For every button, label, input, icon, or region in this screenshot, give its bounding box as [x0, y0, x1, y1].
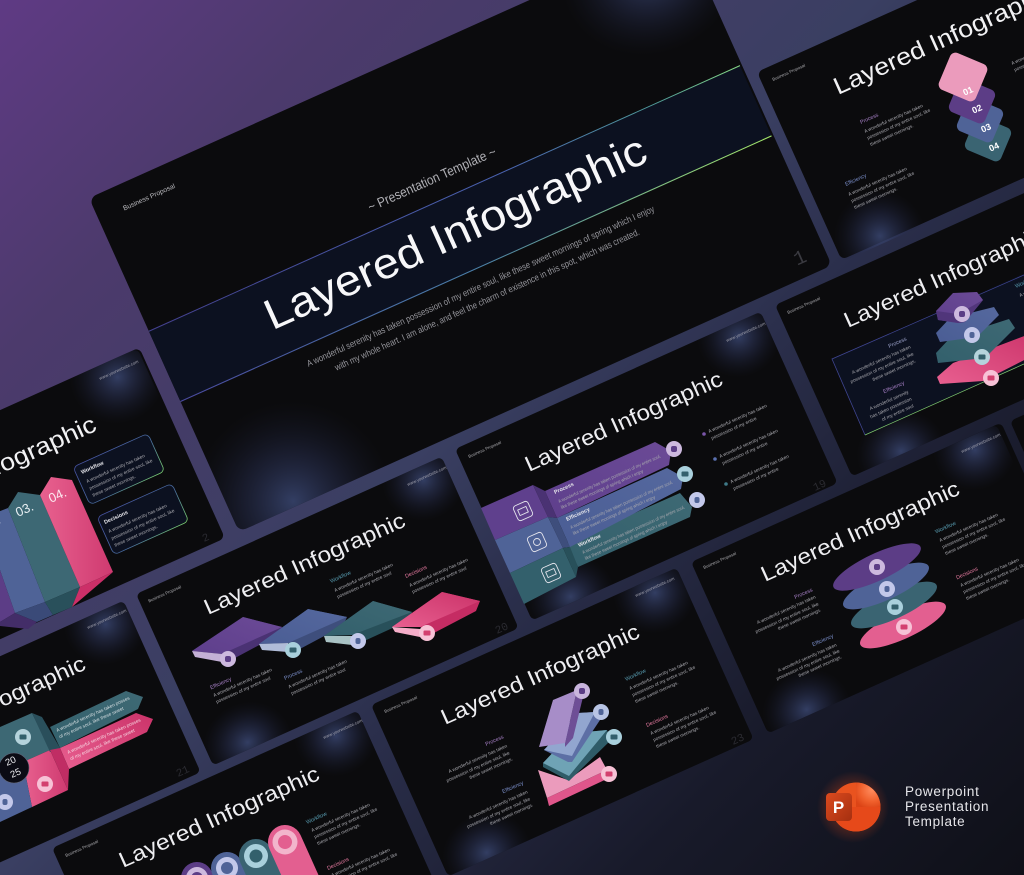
text: workflow: Workflow [624, 668, 647, 683]
text: decisions: possession of my entire soul, like [652, 710, 717, 742]
panel: slide 23 fanned layers [372, 569, 752, 875]
text: process: Process [553, 482, 575, 496]
text: business proposal: Business Proposal [786, 296, 821, 315]
text: process: Process [859, 112, 880, 126]
page number: 19 [812, 478, 829, 495]
text: efficiency: these sweet mornings. [798, 654, 842, 678]
page number: 2 [201, 532, 212, 546]
callout: workflow [73, 433, 165, 505]
text: decisions: A wonderful serenity has taken [408, 557, 469, 588]
column chart 01-04 [0, 477, 113, 629]
text: workflow: Workflow [305, 811, 328, 826]
fanned layers [538, 683, 622, 806]
text: business proposal: Business Proposal [122, 183, 177, 212]
callout: decisions: possession of my entire soul, like [110, 508, 176, 541]
text: process [755, 587, 822, 634]
text: workflow: Workflow [329, 570, 352, 585]
text: efficiency: Efficiency [811, 633, 835, 648]
text: workflow: Workflow [934, 521, 957, 535]
bullet list: A wonderful serenity has taken [707, 403, 768, 434]
text: efficiency: A wonderful serenity has taken possession of my entire soul, [569, 479, 674, 530]
text: process: A wonderful serenity has taken [756, 594, 817, 625]
ribbon diagram: 20 [4, 754, 18, 769]
text: decisions: possession of my entire soul [411, 565, 467, 594]
text: efficiency: A wonderful serenity has taken [777, 642, 838, 673]
column chart 01-04: 03. [13, 499, 36, 520]
text: powerpoint presentation template: Powerpoint [905, 784, 980, 799]
title band [149, 65, 772, 402]
text: efficiency: Efficiency [844, 173, 868, 188]
text: workflow [1014, 275, 1024, 298]
text: efficiency: possession of my entire soul, like [466, 796, 531, 829]
icon: powerpoint logo: P [833, 798, 844, 817]
text: efficiency [466, 780, 534, 829]
text: business proposal: Business Proposal [771, 63, 806, 82]
text: decisions: A wonderful serenity has taken [959, 557, 1020, 588]
pill chart [176, 820, 326, 875]
bullet list [702, 403, 793, 491]
text: workflow: A wonderful serenity has taken possession of my entire soul, [581, 504, 686, 555]
text: workflow: A wonderful serenity has taken [628, 660, 689, 691]
text: efficiency: like these sweet mornings of spring which I enjoy [572, 494, 657, 536]
callout: workflow: possession of my entire soul, like [88, 458, 154, 491]
text: process: possession of my entire soul [290, 667, 346, 696]
heading: Layered Infographic [840, 222, 1024, 333]
text: process [446, 734, 513, 783]
text: efficiency: A wonderful serenity has taken [847, 166, 908, 197]
panel: slide 19 arrows [456, 313, 836, 619]
text: workflow: A wonderful serenity has taken [310, 802, 371, 833]
text: efficiency [844, 164, 918, 210]
text: workflow: Workflow [577, 533, 603, 549]
text: efficiency: A wonderful serenity has taken [468, 789, 529, 820]
stacked squares 01-04: 04 [987, 140, 1001, 154]
text: workflow: these sweet mornings. [316, 822, 361, 846]
text: efficiency: Efficiency [882, 380, 906, 395]
text: workflow: possession of my entire soul [336, 570, 392, 599]
panel: slide stacked blocks [776, 193, 1024, 475]
text: process: A wonderful serenity has taken [448, 743, 508, 774]
callout: workflow: Workflow [80, 460, 106, 476]
text: workflow [624, 658, 699, 704]
text: efficiency [869, 380, 914, 422]
arrow diagram [481, 441, 705, 604]
text: process: possession of my entire soul, like [850, 351, 915, 384]
callout: decisions: Decisions [103, 510, 129, 526]
text: efficiency: Efficiency [209, 676, 233, 691]
text: efficiency: these sweet mornings. [853, 186, 898, 210]
text: workflow: like these sweet mornings of spring which I enjoy [584, 519, 669, 561]
text: efficiency: Efficiency [501, 780, 525, 795]
text: efficiency [776, 633, 842, 681]
panel: slide 01-04 squares [758, 0, 1024, 258]
description: with my whole heart. I am alone, and feel the charm of existence in this spot, which was created. [332, 227, 641, 373]
description: A wonderful serenity has taken possession of my entire soul, like these sweet mornings of spring which I enjoy [305, 204, 656, 369]
text: workflow: possession of my entire soul, like [631, 665, 696, 697]
ellipse stack [828, 534, 951, 657]
text: workflow [305, 800, 381, 846]
website: www.yourwebsite.com [725, 321, 767, 343]
column chart 01-04: 04. [46, 485, 69, 506]
subtitle: ~ Presentation Template ~ [365, 144, 499, 215]
text: process: possession of my entire soul, like [755, 601, 820, 634]
heading: Layered Infographic [437, 619, 643, 730]
page number: 23 [730, 732, 747, 749]
stacked squares 01-04: 01 [961, 84, 975, 98]
text: teal ribbon: A wonderful serenity has taken posses [55, 695, 131, 733]
text: teal ribbon: of my entire soul, like these sweet [58, 706, 125, 739]
text: pink ribbon: A wonderful serenity has taken posses [66, 717, 142, 755]
bullet list: A wonderful serenity has taken [718, 428, 779, 459]
callout: workflow: A wonderful serenity has taken [85, 453, 146, 484]
text: workflow: these sweet mornings. [944, 532, 989, 556]
text: decisions [645, 703, 720, 749]
website: www.yourwebsite.com [98, 359, 140, 381]
stacked squares 01-04: 02 [970, 102, 984, 116]
text: workflow: A wonderful serenity has taken [938, 512, 999, 543]
text: decisions: Decisions [955, 566, 979, 581]
text: pink ribbon: of my entire soul, like these sweet [69, 728, 136, 761]
stacked 3D blocks [936, 292, 1024, 386]
text: efficiency: these sweet mornings. [489, 802, 534, 826]
icon outlines [512, 500, 562, 584]
text: efficiency: possession of my entire soul [215, 675, 271, 704]
text: business proposal: Business Proposal [383, 695, 418, 714]
panel: slide 21 folded ribbons [0, 602, 199, 862]
text: business proposal: Business Proposal [147, 584, 182, 603]
website: www.yourwebsite.com [960, 432, 1002, 454]
website: www.yourwebsite.com [634, 576, 676, 598]
callout: decisions: A wonderful serenity has taken [107, 503, 168, 534]
text: process [859, 101, 934, 147]
text: workflow: A wonderful serenity has taken [333, 562, 394, 593]
heading: Layered Infographic [521, 366, 726, 477]
callout: workflow: these sweet mornings. [92, 474, 136, 498]
layered books [192, 592, 480, 667]
text: workflow: possession of my entire soul, like [941, 517, 1006, 549]
page number: 21 [175, 764, 192, 781]
text: efficiency: Efficiency [565, 507, 591, 523]
ribbon diagram: 25 [9, 766, 23, 781]
text: business proposal: Business Proposal [702, 551, 737, 570]
text: process: possession of my entire soul, like [446, 750, 511, 783]
text: decisions: Decisions [404, 565, 428, 580]
text: process: Process [485, 734, 505, 748]
text: process: A wonderful serenity has taken [851, 344, 912, 375]
website: www.yourwebsite.com [406, 465, 448, 487]
callout: decisions: these sweet mornings. [114, 524, 158, 548]
text: process: these sweet mornings. [469, 756, 513, 780]
panel: slide 22 pills [54, 712, 432, 875]
text: decisions: Decisions [326, 857, 350, 872]
text: process: A wonderful serenity has taken [287, 659, 348, 689]
callout: decisions [97, 483, 189, 555]
panel: slide ellipses [692, 424, 1024, 732]
text: decisions [955, 555, 1024, 601]
text: process: Process [283, 668, 304, 682]
bullet list: possession of my entire [721, 441, 769, 466]
title: Layered Infographic [257, 126, 654, 340]
bullet list: possession of my entire [732, 466, 780, 491]
heading: Layered Infographic [200, 507, 409, 620]
text: efficiency: possession of my entire soul, like [850, 171, 915, 203]
text: efficiency: A wonderful serenity has taken [212, 667, 273, 698]
text: decisions: these sweet mornings. [965, 577, 1010, 601]
text: process: these sweet mornings. [869, 123, 914, 147]
text: business proposal: Business Proposal [467, 440, 502, 459]
text: workflow: possession of my entire soul, like [313, 807, 378, 839]
bullet list: possession of my entire [710, 416, 758, 441]
text: workflow: these sweet mornings. [634, 680, 679, 704]
text: decisions: Decisions [645, 714, 669, 729]
text: decisions: A wonderful serenity has taken [649, 705, 710, 736]
framed band [832, 240, 1024, 435]
stacked squares 01-04: 03 [979, 121, 993, 135]
text: efficiency: has taken possession [869, 396, 913, 419]
icon: powerpoint logo [817, 771, 889, 843]
text: process: these sweet mornings. [777, 607, 822, 631]
text: process: like these sweet mornings of spring which I enjoy [560, 468, 645, 510]
page number: 1 [790, 246, 811, 272]
text: decisions: these sweet mornings. [655, 725, 700, 749]
panel: main title slide [92, 0, 830, 530]
website: www.yourwebsite.com [86, 608, 128, 630]
text: efficiency: of my entire soul [881, 403, 914, 422]
text: process: Process [794, 587, 814, 601]
text: process: these sweet mornings. [872, 358, 916, 382]
text: process: Process [888, 336, 908, 350]
text: process: possession of my entire soul, like [866, 108, 931, 140]
bullet list: A wonderful serenity has taken [729, 454, 790, 484]
text: efficiency: A wonderful serenity [869, 389, 910, 411]
text: process [850, 336, 916, 384]
panel: far right slide corner [1010, 284, 1024, 592]
page number: 20 [494, 621, 511, 638]
heading: Layered Infographic [757, 476, 963, 587]
ribbon diagram [0, 691, 153, 822]
text: efficiency: possession of my entire soul, like [776, 648, 841, 681]
text: process: A wonderful serenity has taken [863, 103, 924, 134]
text: business proposal: Business Proposal [64, 839, 99, 858]
website: www.yourwebsite.com [322, 718, 364, 740]
text: process: A wonderful serenity has taken possession of my entire soul, [557, 453, 662, 504]
text: powerpoint presentation template: Presentation [905, 799, 989, 814]
heading: Layered Infographic [115, 761, 323, 873]
panel: slide 2 columns [0, 349, 224, 640]
text: workflow [934, 510, 1009, 556]
panel: slide 20 books [138, 458, 517, 764]
stacked squares 01-04 [937, 51, 1013, 163]
text: powerpoint presentation template: Template [905, 814, 965, 829]
